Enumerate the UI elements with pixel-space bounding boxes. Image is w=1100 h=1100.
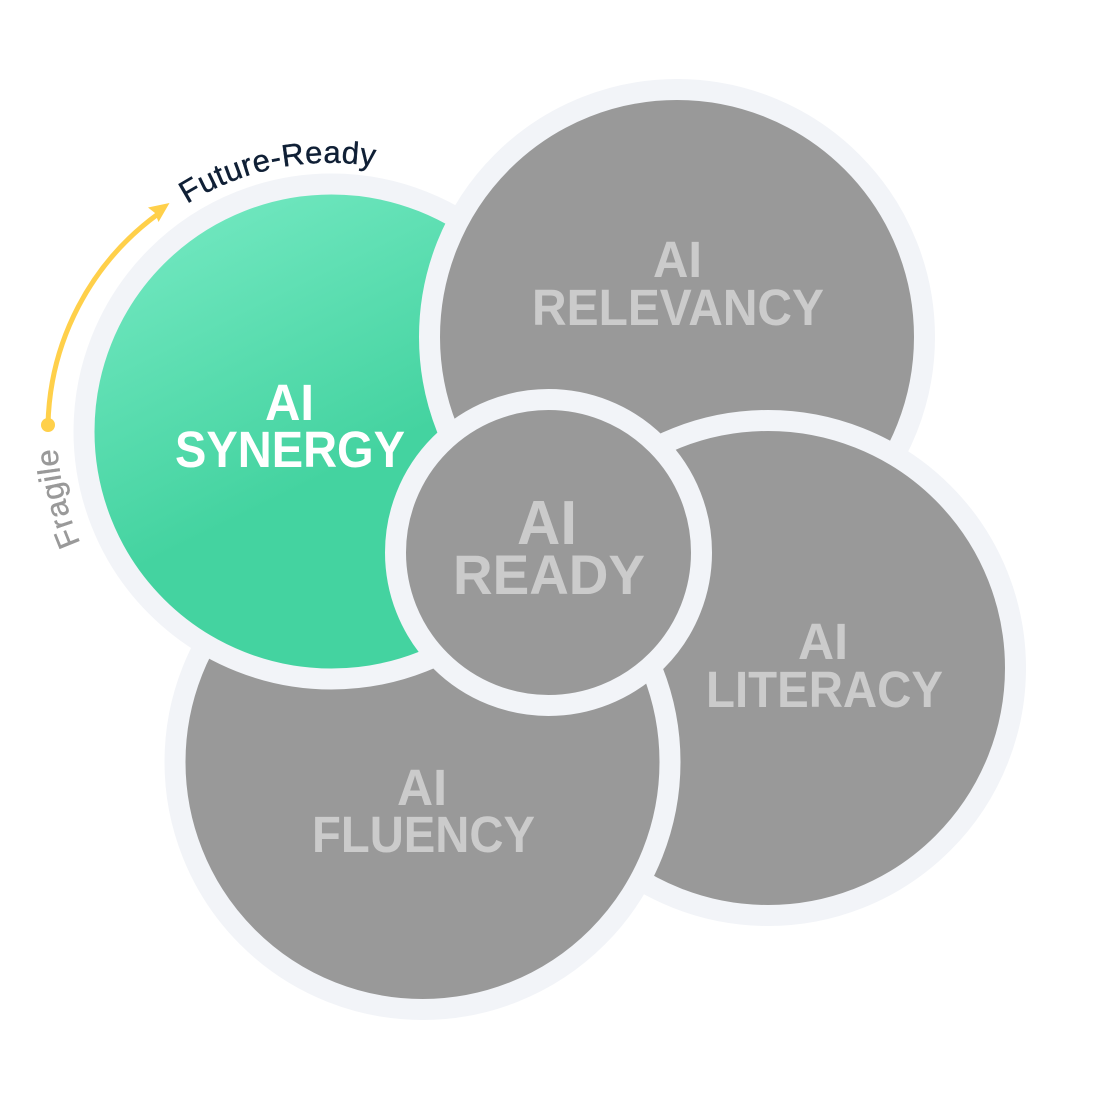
arrow: fragile to future-ready	[41, 203, 170, 432]
circle: AI Ready: READY	[453, 543, 645, 606]
circle: AI Synergy: SYNERGY	[175, 421, 405, 478]
circle: AI Literacy overlap over Relevancy	[660, 410, 995, 600]
circle: AI Literacy	[520, 420, 1016, 916]
label: Future-Ready: Future-Ready	[178, 141, 377, 203]
circle: AI Ready: AI	[517, 489, 577, 558]
diagram: AI readiness overlapping circles	[37, 79, 1026, 1020]
circle: AI Relevancy	[430, 90, 924, 584]
circle: AI Fluency: AI	[397, 759, 447, 816]
circle: AI Literacy: LITERACY	[706, 661, 943, 718]
circle: AI Literacy: AI	[798, 613, 848, 670]
circle: AI Relevancy: RELEVANCY	[532, 279, 824, 336]
circle: AI Synergy	[84, 184, 579, 679]
circle: AI Fluency	[175, 514, 670, 1010]
circle: AI Relevancy: AI	[653, 231, 702, 288]
circle: AI Synergy: AI	[265, 374, 314, 431]
label: Fragile: Fragile	[37, 450, 80, 550]
circle: AI Ready	[396, 400, 702, 706]
circle: AI Fluency: FLUENCY	[312, 806, 535, 863]
